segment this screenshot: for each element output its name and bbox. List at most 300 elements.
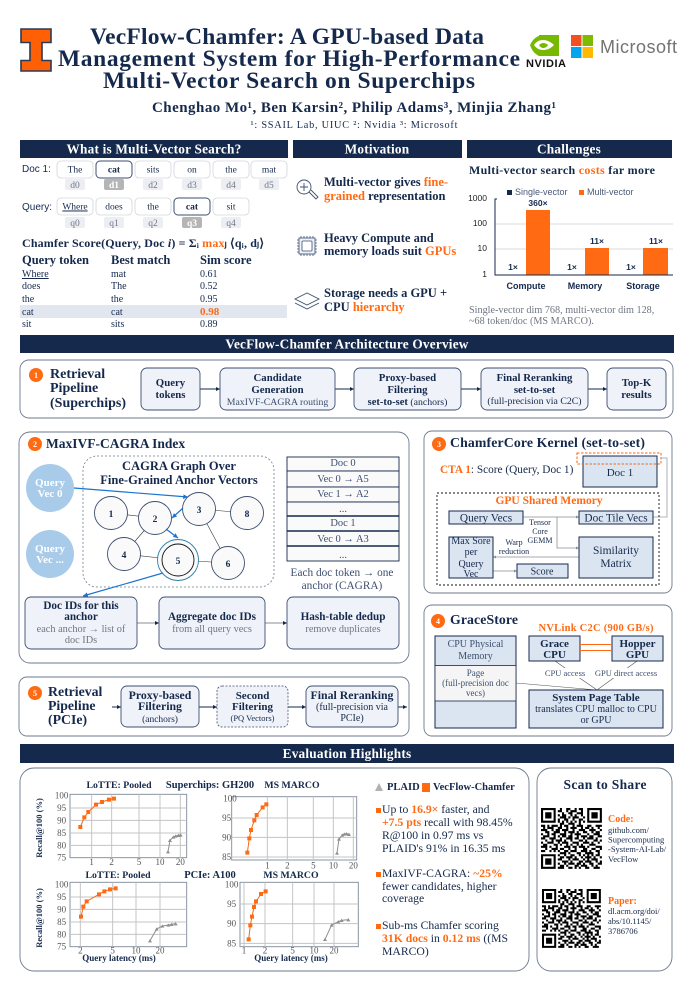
box: grace cpu: CPU (543, 649, 566, 661)
document tokens: d2 (148, 181, 158, 191)
gpu shared memory: Query (458, 559, 484, 570)
chart: pcie marco (225, 879, 358, 956)
box: final reranking: Final Reranking (497, 372, 573, 384)
subheading: Multi-vector search costs far more (469, 163, 656, 177)
axis label: recall bottom: Recall@100 (%) (34, 888, 44, 948)
chart: pcie lotte: 20 (156, 946, 165, 956)
box: hopper gpu: GPU (626, 649, 649, 661)
heading: what is multi-vector search (20, 140, 288, 158)
panel 1 title: (Superchips) (50, 396, 126, 411)
cagra graph: Fine-Grained Anchor Vectors (100, 473, 258, 487)
badge 1 (29, 368, 43, 382)
paper link: 3786706 (608, 926, 638, 936)
chart: superchips lotte: 75 (57, 853, 67, 863)
box: dedup: Hash-table dedup (301, 611, 385, 623)
chart: pcie lotte: 100 (55, 879, 69, 889)
highlight: scoring: MARCO) (382, 945, 429, 958)
document tokens: The (68, 166, 82, 176)
box: grace cpu (529, 636, 580, 661)
chart: pcie lotte: 75 (57, 942, 67, 952)
nvlink lines (580, 644, 612, 650)
cta highlight (577, 453, 661, 464)
chart: superchips lotte: 80 (57, 840, 67, 850)
logo: NVIDIA: NVIDIA (526, 58, 566, 70)
box: aggregate: Aggregate doc IDs (168, 611, 257, 623)
panel 5 title: Retrieval (48, 684, 103, 699)
box: second filtering (217, 686, 288, 727)
box: query tokens: tokens (156, 389, 186, 401)
box: second filtering: (PQ Vectors) (230, 713, 275, 723)
score table: 0.89 (200, 319, 218, 330)
box: candidate generation (220, 368, 335, 410)
box: hopper gpu: Hopper (619, 638, 656, 650)
gpu shared memory: Vec (464, 569, 479, 580)
highlight: scoring: Sub-ms Chamfer scoring (382, 919, 499, 932)
box: proxy-based filtering (121, 686, 199, 727)
score table: 0.61 (200, 269, 218, 280)
chart: superchips marco (222, 793, 358, 870)
gpu shared memory: per (465, 547, 478, 558)
chart: pcie lotte: 5 (110, 946, 115, 956)
heading: evaluation highlights: Evaluation Highlights (283, 746, 411, 761)
highlight: candidates: coverage (382, 892, 424, 905)
query vec circles: Query (35, 477, 65, 489)
box: doc ids: each anchor → list of (37, 624, 126, 635)
document tokens: on (187, 166, 197, 176)
access labels: GPU direct access (595, 668, 657, 678)
chart: superchips lotte (55, 790, 187, 867)
bar chart: Memory (568, 281, 602, 291)
box: query tokens (141, 368, 200, 410)
logo: NVIDIA (526, 35, 566, 70)
query tokens: the (147, 202, 159, 212)
query tokens: q4 (226, 219, 236, 229)
score table: cat (22, 307, 34, 318)
cpu physical memory: CPU Physical (448, 639, 504, 650)
document tokens: the (225, 166, 237, 176)
box: final reranking: Final Reranking (311, 688, 394, 702)
text: hierarchy: CPU hierarchy (324, 300, 405, 314)
heading: scan to share: Scan to Share (564, 777, 646, 792)
panel 4 title: GraceStore (450, 612, 518, 627)
chamfer score formula: Chamfer Score(Query, Doc i) = Σᵢ maxⱼ ⟨qᵢ, dⱼ⟩ (22, 236, 264, 250)
chart titles bottom (85, 870, 319, 881)
icon: chip (297, 236, 317, 256)
document tokens: Doc 1: (22, 164, 51, 175)
bar chart: 10 (478, 243, 487, 253)
chart legend (375, 782, 515, 793)
panel: scan to share (537, 768, 672, 971)
box: top-k results (607, 368, 666, 410)
authors: Chenghao Mo¹, Ben Karsin², Philip Adams³, Minjia Zhang¹ (152, 100, 556, 116)
box: top-k results: results (621, 389, 652, 401)
badge 4: 4 (436, 617, 440, 626)
box: doc 1 (583, 456, 657, 487)
panel 1 title: Pipeline (50, 381, 98, 396)
chart: pcie marco: 2 (263, 946, 267, 956)
chart: superchips lotte: 10 (156, 857, 165, 867)
bar chart: 11× (649, 236, 663, 246)
icon: layers (295, 293, 319, 309)
score table: 0.98 (200, 306, 220, 318)
box: candidate generation: MaxIVF-CAGRA routing (227, 397, 328, 408)
anchor table: ... (339, 504, 347, 515)
cagra graph: 3 (197, 506, 202, 516)
query tokens: cat (186, 202, 199, 212)
cagra graph: 5 (176, 557, 181, 567)
score table: The (111, 281, 127, 292)
cpu physical memory: Page (467, 668, 484, 678)
footnote: Single-vector dim 768, multi-vector dim 128, (469, 305, 654, 316)
query tokens: q3 (187, 219, 197, 229)
document tokens: d1 (109, 181, 119, 191)
bar chart: Storage (626, 281, 660, 291)
box: second filtering: Second (236, 690, 269, 702)
chart: superchips lotte: 85 (57, 828, 67, 838)
panel: challenges (467, 140, 673, 327)
chart: superchips lotte: 2 (109, 857, 114, 867)
axis label: recall top: Recall@100 (%) (34, 798, 44, 858)
paper link: Paper: (608, 896, 637, 907)
text: gpus: Heavy Compute and (324, 231, 434, 245)
box: system page table: System Page Table (552, 692, 640, 704)
gpu shared memory: Tensor (529, 518, 551, 527)
highlight: speed: Up to 16.9× faster, and (382, 803, 489, 816)
chart: pcie marco: 20 (330, 946, 339, 956)
badge 1: 1 (34, 371, 38, 380)
cagra graph: 2 (153, 515, 158, 525)
chart: pcie lotte: 90 (57, 904, 67, 914)
query tokens: q0 (70, 219, 80, 229)
badge 2: 2 (33, 440, 37, 449)
badge 2 (28, 437, 42, 451)
chart: pcie marco: 5 (290, 946, 295, 956)
box: proxy-based filtering (354, 368, 461, 410)
highlight: scoring (376, 919, 508, 958)
score table: 0.95 (200, 294, 218, 305)
score table: the (111, 294, 124, 305)
panel 2: maxivf-cagra index (19, 432, 409, 663)
box: doc ids (25, 597, 137, 649)
logo: Microsoft (571, 35, 677, 58)
logo: Microsoft: Microsoft (600, 37, 677, 57)
chart: pcie lotte: 80 (57, 929, 67, 939)
access labels: CPU access (545, 668, 585, 678)
score table: Where (22, 269, 49, 280)
highlight: candidates: fewer candidates, higher (382, 880, 497, 893)
gpu shared memory: GEMM (528, 536, 552, 545)
gpu shared memory: Matrix (600, 558, 632, 570)
box: proxy-based filtering: (anchors) (142, 714, 178, 725)
bar chart: Single-vector (515, 187, 568, 197)
chart: superchips marco: 5 (311, 860, 316, 870)
code link: github.com/ (608, 825, 649, 835)
box: grace cpu: Grace (540, 638, 569, 650)
code link (608, 814, 667, 864)
chart legend: VecFlow-Chamfer (433, 782, 515, 793)
document tokens: d4 (226, 181, 236, 191)
box: proxy-based filtering: Proxy-based (379, 372, 436, 384)
chart: pcie lotte: 95 (57, 892, 67, 902)
query vec circles: Vec 0 (38, 488, 63, 500)
panel 5: retrieval pipeline pcie (19, 677, 409, 736)
text: fine-grained: Multi-vector gives fine- (324, 175, 448, 189)
box: final reranking: set-to-set (514, 384, 556, 396)
cagra graph: 6 (226, 560, 231, 570)
highlight: speed: PLAID's 91% in 16.35 ms (382, 842, 506, 855)
chart: pcie marco: 100 (225, 879, 239, 889)
chart: pcie lotte: 10 (132, 946, 141, 956)
heading: what is multi-vector search: What is Multi-Vector Search? (67, 142, 241, 156)
gpu shared memory: Query Vecs (460, 512, 512, 524)
badge 3 (432, 437, 446, 451)
traversal arrows (74, 488, 188, 596)
chart: superchips lotte: 1 (89, 857, 94, 867)
bar chart: Compute (506, 281, 546, 291)
bar chart: 100 (473, 218, 487, 228)
document tokens: d5 (264, 181, 274, 191)
score table: sit (22, 319, 32, 330)
panel 1: retrieval pipeline superchips (20, 360, 673, 418)
text: hierarchy: Storage needs a GPU + (324, 286, 447, 300)
highlight: speed: +7.5 pts recall with 98.45% (382, 816, 513, 829)
title: Management System for High-Performance (58, 46, 520, 72)
cagra graph: 8 (245, 510, 250, 520)
query tokens: does (105, 202, 123, 212)
highlight: candidates: MaxIVF-CAGRA: ~25% (382, 867, 503, 880)
box: proxy-based filtering: Filtering (387, 384, 428, 396)
box: final reranking: (full-precision via C2C) (487, 396, 582, 407)
panel 4: gracestore (424, 605, 672, 736)
heading: architecture overview (20, 335, 674, 353)
box: doc ids: Doc IDs for this (43, 600, 119, 612)
document tokens: cat (108, 166, 121, 176)
cagra graph: 1 (109, 510, 114, 520)
box: doc 1: Doc 1 (607, 467, 633, 479)
gpu shared memory: Doc Tile Vecs (584, 512, 648, 524)
chart: pcie lotte: 85 (57, 917, 67, 927)
pipeline arrows (200, 388, 607, 390)
paper link: abs/10.1145/ (608, 916, 652, 926)
panel: what is multi-vector search (20, 140, 288, 330)
chart: pcie lotte: 2 (78, 946, 83, 956)
score table: Query token (22, 253, 89, 267)
cagra graph (83, 456, 274, 587)
query tokens: Where (62, 202, 88, 212)
score table: does (22, 281, 40, 292)
document tokens: sits (147, 166, 160, 176)
badge 3: 3 (437, 440, 441, 449)
box: doc ids: anchor (64, 611, 98, 623)
panel 5 title: Pipeline (48, 698, 96, 713)
query tokens: Query: (22, 202, 52, 213)
bar chart: 1× (626, 262, 636, 272)
chart legend: PLAID (387, 782, 420, 793)
chart: pcie marco: 10 (310, 946, 319, 956)
paper link: dl.acm.org/doi/ (608, 906, 660, 916)
icon: qr code for paper (542, 890, 601, 947)
text: gpus: memory loads suit GPUs (324, 244, 456, 258)
chart: superchips marco: 20 (349, 860, 358, 870)
icon: magnifier (297, 180, 318, 199)
box: system page table: translates CPU malloc to CPU (535, 704, 658, 715)
affiliations: ¹: SSAIL Lab, UIUC ²: Nvidia ³: Microsoft (250, 120, 458, 131)
chart: superchips marco: 2 (285, 860, 290, 870)
chart titles top: Superchips: GH200 (166, 780, 254, 791)
chart: pcie lotte (55, 879, 187, 956)
code link: Code: (608, 814, 634, 825)
chart: superchips marco: 100 (223, 793, 237, 803)
chart titles top: MS MARCO (264, 780, 320, 791)
cagra graph: 4 (122, 551, 127, 561)
heading: challenges (467, 140, 672, 158)
chart: superchips marco: 10 (329, 860, 338, 870)
access lines (516, 661, 637, 690)
gpu shared memory: reduction (499, 547, 529, 556)
anchor table: Vec 0 → A5 (317, 474, 369, 485)
nvlink label: NVLink C2C (900 GB/s) (538, 623, 654, 634)
bar chart (468, 187, 673, 291)
badge 4 (431, 614, 445, 628)
chart: superchips lotte: 90 (57, 815, 67, 825)
cpu physical memory: Memory (458, 651, 493, 662)
chart: superchips lotte: 100 (55, 790, 69, 800)
gpu shared memory: Score (531, 566, 554, 578)
document tokens (22, 161, 287, 191)
gpu shared memory: Warp (505, 538, 523, 547)
gpu shared memory (437, 458, 667, 585)
axis label: latency right: Query latency (ms) (254, 953, 328, 963)
axis label: latency left: Query latency (ms) (82, 953, 156, 963)
chart: pcie marco: 90 (227, 919, 237, 929)
query vec circles: Vec ... (36, 554, 64, 566)
heading: evaluation highlights (20, 744, 674, 763)
anchor table: Vec 0 → A3 (317, 534, 369, 545)
score table: the (22, 294, 35, 305)
title: VecFlow-Chamfer: A GPU-based Data (90, 24, 484, 50)
anchor table: Doc 0 (330, 458, 356, 469)
box: final reranking: PCIe) (340, 713, 364, 724)
chart titles bottom: MS MARCO (263, 870, 319, 881)
chart titles bottom: LoTTE: Pooled (85, 870, 151, 881)
score table: sits (111, 319, 124, 330)
panel 1 title: Retrieval (50, 367, 105, 382)
cpu physical memory (435, 636, 516, 728)
query tokens (22, 198, 249, 229)
title: Multi-Vector Search on Superchips (103, 68, 475, 94)
anchor table (287, 457, 399, 561)
box: proxy-based filtering: Filtering (138, 699, 182, 713)
title (58, 24, 520, 94)
box: top-k results: Top-K (622, 377, 652, 389)
chart: superchips lotte: 5 (137, 857, 142, 867)
score table: Sim score (200, 253, 252, 267)
score table (20, 253, 287, 330)
badge 5 (28, 686, 42, 700)
bar chart: 1× (567, 262, 577, 272)
chart titles top (86, 780, 320, 791)
box: hopper gpu (612, 636, 663, 661)
badge 5: 5 (33, 689, 37, 698)
cpu physical memory: vecs) (466, 688, 485, 698)
pipeline arrows (112, 706, 407, 708)
flow arrows (137, 622, 287, 624)
icon: qr code for repository (541, 809, 602, 868)
paper link (608, 896, 660, 936)
panel 5 title: (PCIe) (48, 712, 87, 728)
panel 2 title: MaxIVF-CAGRA Index (46, 436, 185, 451)
gpu shared memory: GPU Shared Memory (495, 495, 603, 507)
highlight: speed (376, 803, 513, 855)
box: final reranking (481, 368, 588, 410)
anchor table: ... (339, 550, 347, 561)
gpu shared memory: Core (532, 527, 548, 536)
box: proxy-based filtering: Proxy-based (129, 688, 192, 702)
cpu physical memory: (full-precision doc (442, 678, 509, 688)
bar chart: 1000 (468, 193, 487, 203)
document tokens: mat (262, 166, 276, 176)
query tokens: q2 (148, 219, 158, 229)
highlight: scoring: 31K docs in 0.12 ms ((MS (382, 932, 508, 945)
chart titles bottom: PCIe: A100 (184, 870, 236, 881)
cta text: CTA 1: Score (Query, Doc 1) (440, 464, 574, 476)
bar chart: 11× (590, 236, 604, 246)
box: aggregate: from all query vecs (172, 624, 252, 635)
box: dedup (287, 597, 399, 649)
heading: architecture overview: VecFlow-Chamfer Architecture Overview (225, 336, 469, 352)
heading: challenges: Challenges (537, 142, 601, 156)
bar chart: 360× (528, 198, 548, 208)
gpu shared memory: Similarity (593, 545, 639, 557)
query tokens: sit (227, 202, 236, 212)
highlight: speed: R@100 in 0.97 ms vs (382, 829, 484, 842)
chart: pcie marco: 95 (227, 899, 237, 909)
panel: evaluation (20, 768, 529, 971)
code link: -System-AI-Lab/ (608, 844, 667, 854)
box: system page table: or GPU (581, 715, 612, 726)
score table: Best match (111, 253, 170, 267)
chart: superchips lotte: 95 (57, 803, 67, 813)
box: candidate generation: Generation (251, 384, 304, 396)
query vec circles (26, 464, 74, 578)
box: aggregate (159, 597, 265, 649)
anchor caption: anchor (CAGRA) (302, 580, 383, 592)
box: dedup: remove duplicates (305, 624, 381, 635)
access labels (541, 668, 660, 678)
box: doc ids: doc IDs (65, 635, 97, 646)
chart: superchips marco: 1 (265, 860, 270, 870)
anchor caption: Each doc token → one (291, 567, 393, 579)
box: candidate generation: Candidate (254, 372, 302, 384)
chart: pcie marco: 85 (227, 938, 237, 948)
chart: superchips marco: 85 (222, 852, 232, 862)
heading: motivation: Motivation (345, 142, 410, 156)
box: final reranking: (full-precision via (316, 702, 389, 713)
box: proxy-based filtering: set-to-set (anchors) (368, 397, 447, 408)
code link: Supercomputing (608, 834, 665, 844)
query vec circles: Query (35, 543, 65, 555)
code link: VecFlow (608, 854, 639, 864)
bar chart: Multi-vector (587, 187, 634, 197)
box: second filtering: Filtering (232, 701, 273, 713)
box: query tokens: Query (156, 377, 186, 389)
panel 3: chamfercore kernel (424, 431, 672, 593)
panel: motivation (293, 140, 462, 314)
chart: superchips marco: 90 (222, 832, 232, 842)
score table: 0.52 (200, 281, 218, 292)
box: final reranking (306, 686, 398, 727)
bar chart: 1× (508, 262, 518, 272)
